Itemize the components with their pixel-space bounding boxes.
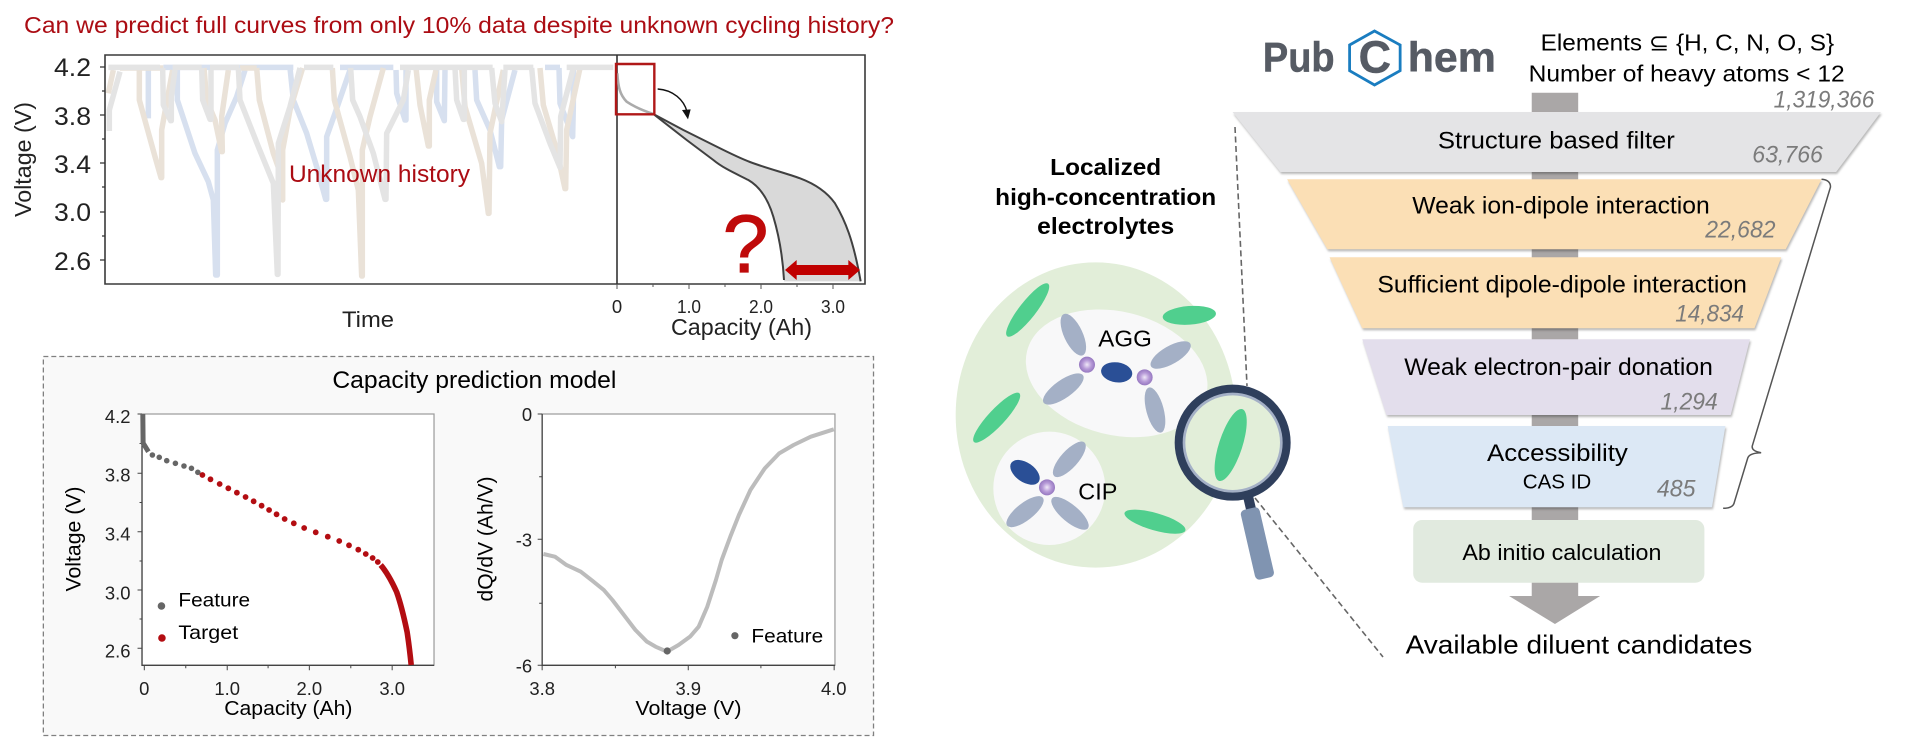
x tick labels: 1.0 [214,678,240,699]
capacity ticks labels: 0 [612,296,622,317]
funnel stage: dipole-dipole [1330,257,1781,328]
funnel stage: ion-dipole: Weak ion-dipole interaction [1412,192,1710,219]
capacity ticks labels: 2.0 [749,296,773,317]
dQ/dV curve [543,429,834,652]
logo: PubChem: hem [1408,34,1496,81]
bracket [1723,179,1831,508]
y axis labels: 3.0 [54,199,91,227]
y tick labels: 3.0 [105,582,131,603]
panel: localized high-concentration electrolytes [956,127,1383,657]
x title: Capacity (Ah) [224,697,352,720]
arrow: funnel flow [1509,93,1600,624]
funnel stage: ion-dipole: 22,682 [1704,216,1775,243]
y axis labels [54,54,91,276]
y ticks [100,67,105,260]
legend: Feature [751,625,823,647]
dashed zoom lines [1235,127,1383,657]
y axis labels: 3.8 [54,103,91,131]
curved arrow [658,89,691,119]
x tick labels: 4.0 [821,678,847,699]
x tick labels [529,678,847,699]
y tick labels: 4.2 [105,406,131,427]
logo: PubChem: C [1359,31,1391,83]
y tick labels [105,406,131,662]
feature point [664,647,671,655]
capacity ticks labels [612,296,845,317]
AGG cluster [1012,291,1221,456]
voltage history traces [108,67,613,276]
double arrow [785,260,860,280]
funnel stage: electron-pair donation: Weak electron-pair donation [1404,354,1713,381]
funnel stage: accessibility: Accessibility [1487,440,1628,467]
x tick labels: 3.8 [529,678,555,699]
x tick labels: 3.0 [379,678,405,699]
plot: dQ/dV vs voltage [474,404,847,720]
y tick labels: 3.4 [105,524,131,545]
x tick labels: 2.0 [297,678,322,699]
funnel stage: structure filter: Structure based filter [1438,127,1675,154]
legend: Feature [178,589,250,612]
funnel stage: ab initio [1413,520,1704,583]
heading [995,154,1216,239]
annotation: unknown history: Unknown history [289,161,471,188]
heading: high-concentration [995,184,1216,210]
y tick labels: 3.8 [105,465,131,486]
funnel stage: structure filter [1233,112,1881,172]
y axis title: Voltage (V) [10,102,36,217]
dashed panel box [43,356,874,736]
voltage axis divider [616,55,618,284]
criteria text [1529,30,1845,87]
title: question: Can we predict full curves from only 10% data despite unknown cycling history? [24,12,894,38]
target points [200,472,411,665]
funnel stage: ab initio: Ab initio calculation [1462,540,1661,565]
chart frame [105,55,865,284]
legend: Target [178,622,239,644]
discharge curves [616,64,861,281]
y tick labels [516,404,532,676]
y tick labels: 0 [522,404,532,425]
funnel stage: dipole-dipole: Sufficient dipole-dipole interaction [1377,272,1747,299]
y axis labels: 3.4 [54,151,91,179]
y axis labels: 4.2 [54,54,91,82]
time label: Time [342,307,394,332]
panel: capacity prediction model [43,356,874,736]
x ticks [617,284,833,289]
lower curve [653,114,784,280]
plot area [542,414,835,665]
funnel stage: accessibility: CAS ID [1523,471,1591,493]
panel title: Capacity prediction model [332,367,616,394]
panel: unknown history chart [10,54,865,340]
y title: Voltage (V) [63,486,86,592]
y tick labels: 2.6 [105,641,131,662]
x title: Voltage (V) [635,697,741,720]
funnel stage: structure filter: 63,766 [1752,141,1824,168]
diluent molecules [968,279,1217,539]
x tick labels: 3.9 [675,678,701,699]
question mark: ? [723,199,768,290]
icon: magnifying glass [1012,291,1287,581]
feature points [143,414,201,475]
logo: PubChem [1263,31,1496,85]
AGG label: AGG [1098,326,1152,352]
plot: voltage vs capacity [63,406,434,720]
result label: Available diluent candidates [1406,631,1752,659]
red selection box [616,64,654,114]
electrolyte bubble [956,262,1236,568]
y tick labels: -3 [516,530,532,551]
panel: PubChem screening funnel [1233,30,1881,659]
known initial curve [617,73,653,114]
funnel stage: accessibility [1388,426,1725,507]
plot area [142,414,434,665]
solvation illustration [956,262,1236,568]
y tick labels: -6 [516,655,532,676]
legend [158,589,250,644]
funnel stage: accessibility: 485 [1657,476,1696,503]
criteria text: Elements ⊆ {H, C, N, O, S} [1541,30,1834,56]
x tick labels [139,678,405,699]
CIP cluster [993,432,1105,545]
capacity axis title: Capacity (Ah) [671,314,812,340]
heading: electrolytes [1037,213,1174,239]
funnel stage: electron-pair donation [1362,339,1750,415]
y axis labels: 2.6 [54,248,91,276]
heading: Localized [1050,154,1161,180]
funnel stage: dipole-dipole: 14,834 [1675,301,1744,328]
funnel stage: ion-dipole [1287,179,1822,249]
count: PubChem total: 1,319,366 [1774,86,1875,113]
capacity ticks labels: 1.0 [677,296,701,317]
logo: PubChem: Pub [1263,34,1335,81]
CIP label: CIP [1078,478,1117,504]
y title: dQ/dV (Ah/V) [474,476,497,602]
funnel stage: electron-pair donation: 1,294 [1661,388,1718,415]
criteria text: Number of heavy atoms < 12 [1529,61,1845,87]
capacity ticks labels: 3.0 [821,296,845,317]
grey uncertainty band [653,114,861,281]
x tick labels: 0 [139,678,149,699]
upper curve [653,114,861,281]
